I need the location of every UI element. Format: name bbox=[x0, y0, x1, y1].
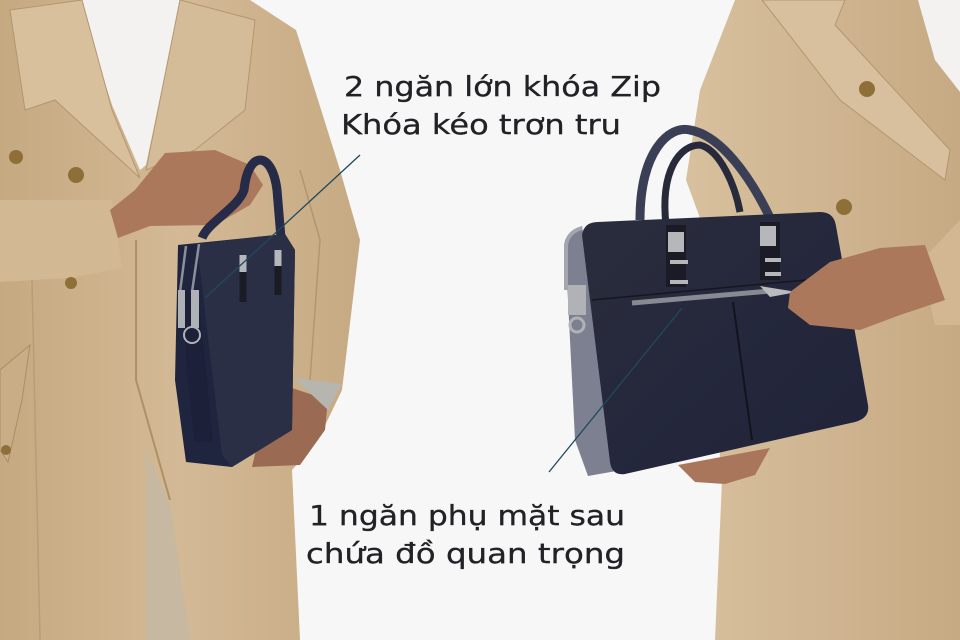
right model white shirt bbox=[918, 0, 960, 92]
pointer line: main compartments bbox=[205, 155, 360, 298]
callout: main compartments: 2 ngăn lớn khóa Zip bbox=[344, 70, 661, 103]
left hand lower with watch bbox=[252, 388, 328, 467]
pointer line: rear compartment bbox=[549, 308, 682, 472]
callout: rear compartment: 1 ngăn phụ mặt sau bbox=[309, 499, 625, 532]
right coat body bbox=[686, 0, 960, 640]
right bag handles bbox=[640, 129, 772, 222]
left model trousers bbox=[146, 450, 190, 640]
right coat lapel bbox=[762, 0, 950, 180]
right hand on zipper bbox=[788, 245, 945, 330]
right model with trench coat bbox=[678, 0, 960, 640]
callout: rear compartment: chứa đồ quan trọng bbox=[306, 537, 625, 570]
right bag buckles bbox=[666, 222, 780, 287]
right bag front view bbox=[565, 129, 868, 476]
right hand under bag bbox=[678, 448, 770, 484]
right coat buttons bbox=[836, 81, 875, 215]
left coat sleeve bbox=[0, 200, 122, 282]
right bag rear zipper bbox=[632, 291, 770, 303]
callout: main compartments bbox=[341, 70, 661, 141]
left hand upper bbox=[110, 150, 263, 238]
right bag main zipper and pull bbox=[566, 228, 582, 290]
callout: rear compartment bbox=[306, 499, 625, 570]
left model white shirt bbox=[82, 0, 180, 170]
callout: main compartments: Khóa kéo trơn tru bbox=[341, 108, 621, 141]
left bag side view bbox=[175, 160, 295, 467]
left coat lapels bbox=[10, 0, 140, 178]
right bag body bbox=[582, 212, 868, 474]
left coat body bbox=[0, 0, 360, 640]
left coat buttons bbox=[1, 150, 84, 455]
left model with trench coat bbox=[0, 0, 360, 640]
left bag zipper pulls bbox=[178, 290, 199, 328]
right bag gusset bbox=[565, 226, 622, 476]
